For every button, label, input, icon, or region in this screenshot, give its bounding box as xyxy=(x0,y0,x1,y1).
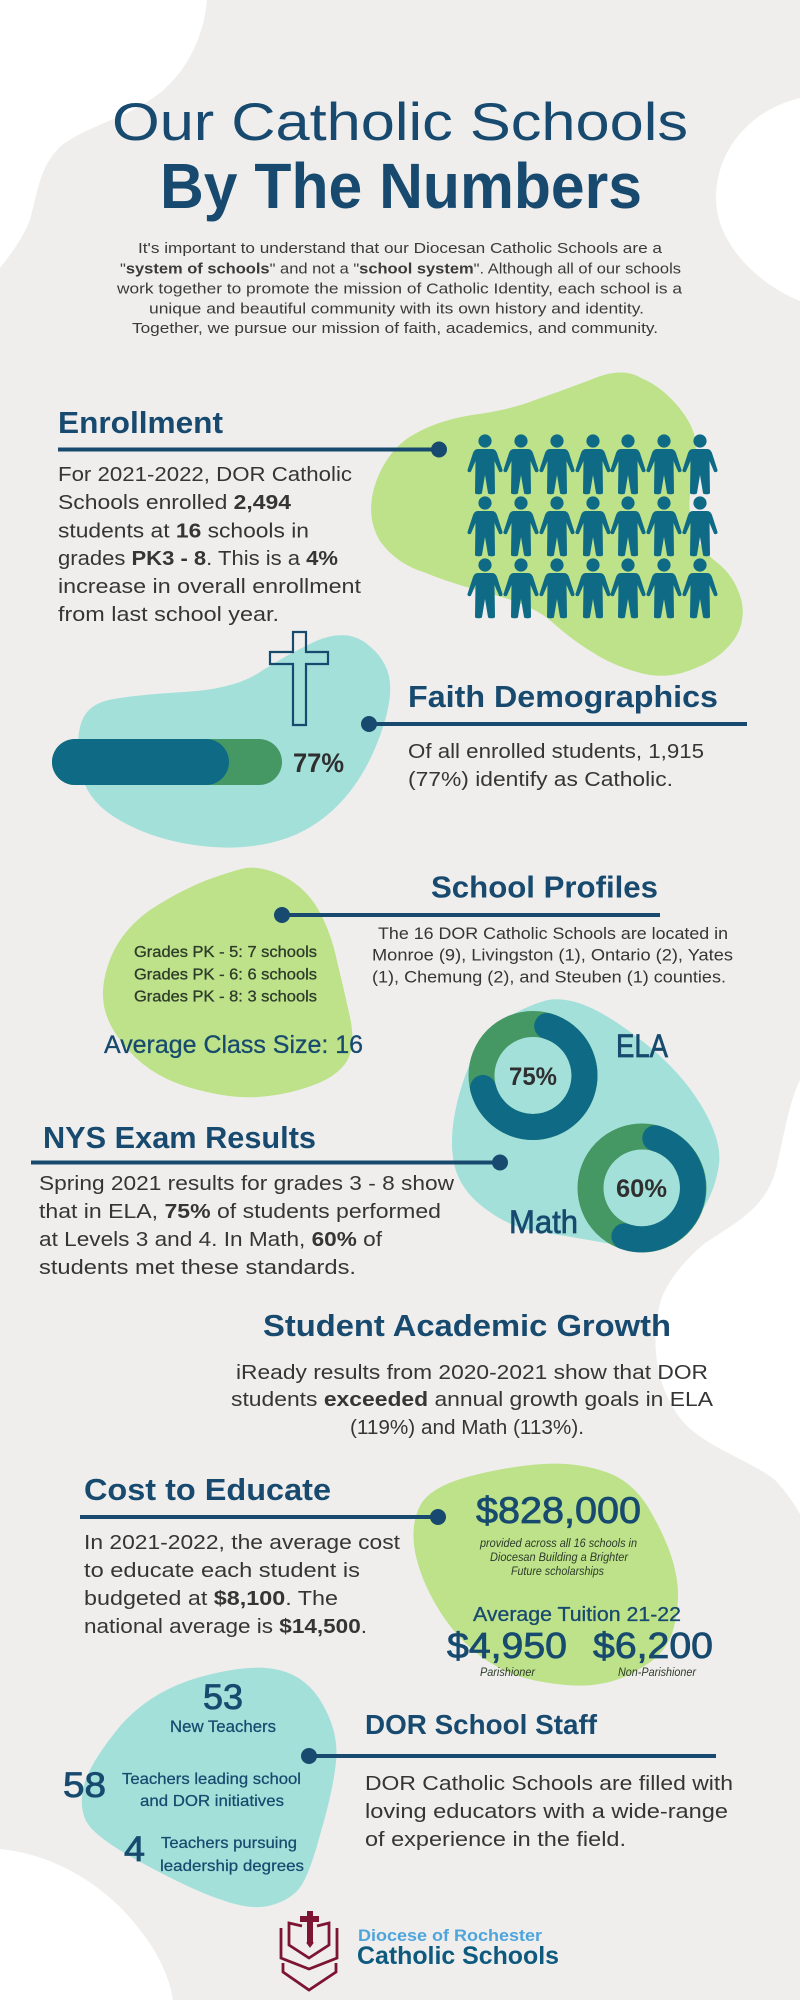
enrollment text xyxy=(58,464,362,626)
enrollment text: from last school year. xyxy=(58,604,279,626)
non-parishioner tuition: $6,200 xyxy=(593,1625,713,1666)
parishioner tuition: $4,950 xyxy=(447,1625,567,1666)
stat: teachers pursuing xyxy=(124,1830,304,1875)
exam text: Spring 2021 results for grades 3 - 8 show xyxy=(39,1173,455,1195)
cost text xyxy=(84,1532,400,1638)
panel: NYS exam results xyxy=(31,999,719,1279)
title xyxy=(112,93,688,222)
enrollment text: For 2021-2022, DOR Catholic xyxy=(58,464,352,486)
school profiles connector xyxy=(274,907,660,923)
enrollment blob xyxy=(371,372,743,676)
faith blob xyxy=(78,635,390,848)
stat: teachers pursuing: Teachers pursuing xyxy=(161,1835,297,1852)
cost heading: Cost to Educate xyxy=(84,1472,331,1507)
average class size: Average Class Size: 16 xyxy=(104,1031,363,1059)
enrollment text: grades PK3 - 8 . This is a 4% xyxy=(58,548,338,570)
parishioner tuition xyxy=(447,1625,567,1679)
scholarship note xyxy=(479,1538,637,1578)
enrollment text: students at 16 schools in xyxy=(58,520,309,542)
faith connector xyxy=(361,716,747,732)
growth text: (119%) and Math (113%). xyxy=(350,1417,584,1439)
enrollment text: increase in overall enrollment xyxy=(58,576,362,598)
people pictogram xyxy=(467,434,718,618)
stat: teachers leading: and DOR initiatives xyxy=(140,1793,284,1810)
enrollment connector xyxy=(58,442,447,458)
tuition heading: Average Tuition 21-22 xyxy=(473,1604,681,1626)
intro text block: work together to promote the mission of Catholic Identity, each school is a xyxy=(116,282,683,298)
school profiles text: Monroe (9), Livingston (1), Ontario (2), Yates xyxy=(372,946,733,964)
panel: cost to educate xyxy=(80,1464,713,1686)
faith heading: Faith Demographics xyxy=(408,679,718,714)
panel: DOR school staff xyxy=(63,1668,733,1907)
staff text: loving educators with a wide-range xyxy=(365,1801,728,1823)
stat: teachers leading: Teachers leading school xyxy=(122,1771,301,1788)
school profile blob xyxy=(103,868,352,1097)
faith text xyxy=(408,741,704,791)
scholarship amount: $828,000 xyxy=(476,1490,641,1531)
enrollment heading: Enrollment xyxy=(58,405,223,440)
non-parishioner tuition xyxy=(593,1625,713,1679)
cost text: to educate each student is xyxy=(84,1560,360,1582)
panel: student academic growth xyxy=(231,1308,714,1439)
stat: new teachers xyxy=(170,1678,276,1736)
grade counts: Grades PK - 6: 6 schools xyxy=(134,966,317,984)
cost text: budgeted at $8,100 . The xyxy=(84,1588,338,1610)
stat: new teachers: New Teachers xyxy=(170,1718,276,1736)
intro text block: "system of schools " and not a " school system ". Although all of our schools xyxy=(120,262,681,278)
scholarship note: Future scholarships xyxy=(511,1566,604,1578)
exam text: at Levels 3 and 4. In Math, 60% of xyxy=(39,1229,382,1251)
stat: teachers pursuing: 4 xyxy=(124,1830,145,1869)
intro text block xyxy=(116,241,683,337)
staff connector xyxy=(301,1748,716,1764)
exam text: that in ELA, 75% of students performed xyxy=(39,1201,441,1223)
staff text xyxy=(365,1773,733,1851)
exam text xyxy=(39,1173,455,1279)
stat: teachers pursuing: leadership degrees xyxy=(160,1858,304,1875)
staff heading: DOR School Staff xyxy=(365,1709,598,1740)
title: Our Catholic Schools xyxy=(112,93,688,152)
school profiles text xyxy=(372,924,733,986)
scholarship note: Diocesan Building a Brighter xyxy=(490,1552,629,1564)
logo xyxy=(281,1911,559,1990)
scholarship note: provided across all 16 schools in xyxy=(479,1538,637,1550)
grade counts: Grades PK - 5: 7 schools xyxy=(134,944,317,961)
logo text: Catholic Schools xyxy=(357,1942,559,1970)
77% label: 77% xyxy=(293,748,344,778)
icon: cross xyxy=(270,632,328,725)
exam connector xyxy=(31,1154,508,1170)
exam text: students met these standards. xyxy=(39,1257,356,1279)
non-parishioner tuition: Non-Parishioner xyxy=(618,1667,697,1679)
growth text: students exceeded annual growth goals in ELA xyxy=(231,1389,714,1411)
logo text: Diocese of Rochester xyxy=(358,1926,542,1945)
exam blob xyxy=(452,999,719,1246)
growth text: iReady results from 2020-2021 show that DOR xyxy=(236,1362,708,1384)
staff blob xyxy=(82,1668,336,1907)
panel: school profiles xyxy=(103,868,733,1097)
staff text: of experience in the field. xyxy=(365,1829,626,1851)
intro text block: It's important to understand that our Diocesan Catholic Schools are a xyxy=(138,241,663,257)
school profiles text: The 16 DOR Catholic Schools are located in xyxy=(378,924,728,943)
cost text: national average is $14,500 . xyxy=(84,1616,367,1638)
school profiles text: (1), Chemung (2), and Steuben (1) counties. xyxy=(372,968,726,986)
ELA value: 75% xyxy=(509,1063,557,1091)
icon: book and cross shield xyxy=(281,1911,337,1990)
stat: teachers leading xyxy=(63,1766,301,1810)
panel: faith demographics xyxy=(52,632,747,848)
grade counts: Grades PK - 8: 3 schools xyxy=(134,988,317,1006)
math label: Math xyxy=(509,1204,578,1240)
math value: 60% xyxy=(616,1175,667,1203)
progress bar 77% xyxy=(52,739,282,785)
cost connector xyxy=(80,1509,446,1525)
growth heading: Student Academic Growth xyxy=(263,1308,671,1343)
growth text xyxy=(231,1362,714,1439)
ELA label: ELA xyxy=(616,1028,669,1064)
parishioner tuition: Parishioner xyxy=(480,1667,536,1679)
school profiles heading: School Profiles xyxy=(431,870,658,904)
staff text: DOR Catholic Schools are filled with xyxy=(365,1773,733,1795)
cost text: In 2021-2022, the average cost xyxy=(84,1532,400,1554)
stat: teachers leading: 58 xyxy=(63,1766,106,1805)
faith text: (77%) identify as Catholic. xyxy=(408,769,673,791)
logo text xyxy=(357,1926,559,1970)
stat: new teachers: 53 xyxy=(203,1678,243,1717)
title: By The Numbers xyxy=(160,150,642,222)
cost blob xyxy=(413,1464,678,1686)
intro text block: unique and beautiful community with its own history and identity. xyxy=(149,302,644,318)
intro text block: Together, we pursue our mission of faith, academics, and community. xyxy=(132,321,658,337)
ELA donut chart xyxy=(482,1024,584,1127)
panel: enrollment xyxy=(58,372,743,676)
exam heading: NYS Exam Results xyxy=(43,1120,316,1155)
grade counts xyxy=(134,944,317,1006)
math donut chart xyxy=(590,1136,694,1240)
enrollment text: Schools enrolled 2,494 xyxy=(58,492,292,514)
faith text: Of all enrolled students, 1,915 xyxy=(408,741,704,763)
